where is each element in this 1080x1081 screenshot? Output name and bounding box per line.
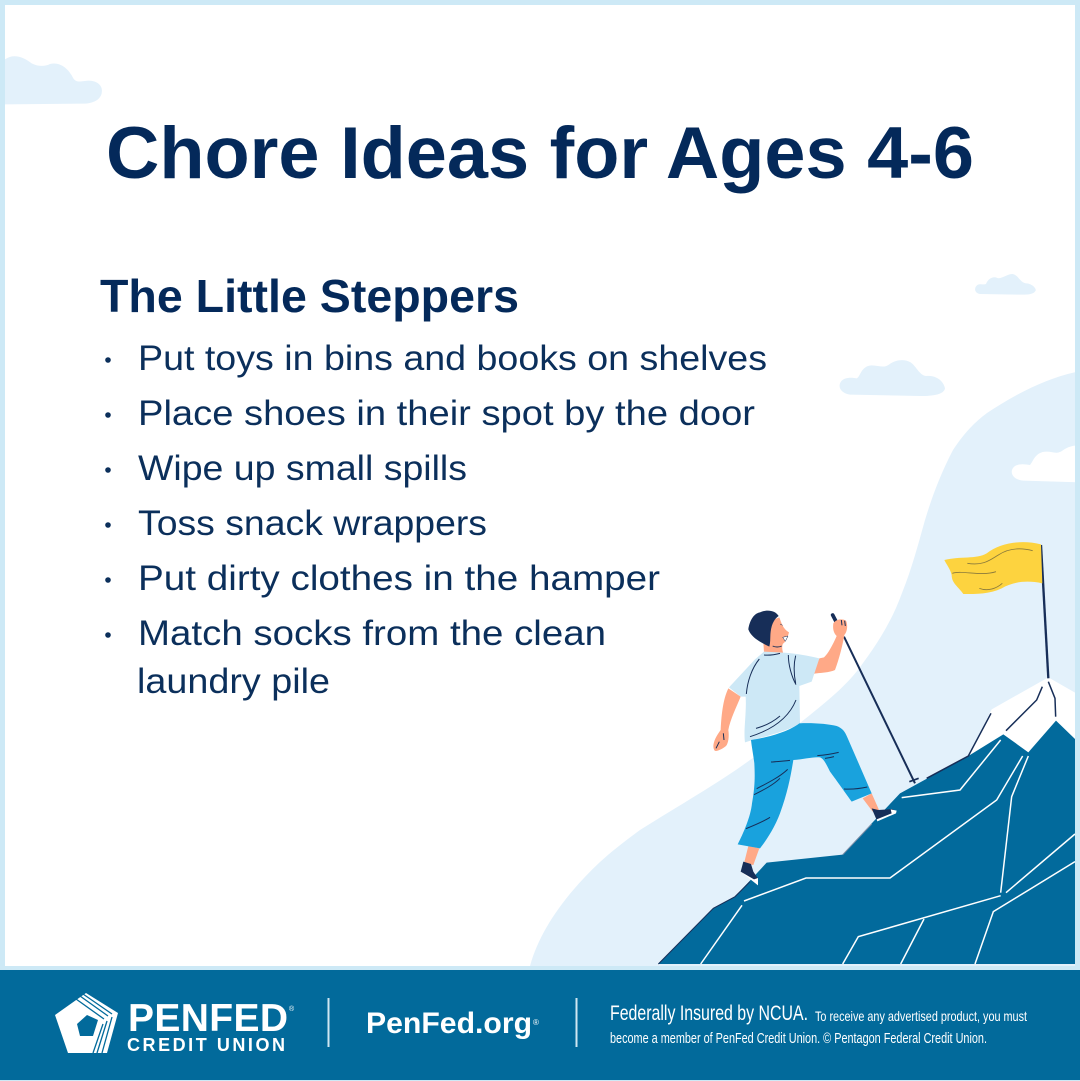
bullet list: Put dirty clothes in the hamper [138, 559, 660, 598]
brand wordmark: ® [289, 1005, 295, 1013]
pants [738, 723, 872, 848]
right arm [813, 619, 847, 674]
bullet list: Place shoes in their spot by the door [138, 394, 755, 433]
hiker figure [713, 611, 897, 885]
mountain dark outlines [658, 682, 1056, 964]
legs [744, 793, 879, 865]
mountain illustration [658, 542, 1075, 964]
icon: trekking pole [833, 615, 919, 783]
left shoe [741, 862, 758, 881]
website: PenFed.org [366, 1007, 532, 1040]
icon: PenFed logo [55, 993, 118, 1053]
icon: snow cap [968, 677, 1075, 756]
hair [748, 611, 779, 647]
disclaimer: Federally Insured by NCUA. [610, 1002, 808, 1025]
cloud: white on hill [1012, 445, 1077, 482]
cloud: small right [975, 274, 1036, 295]
neck and face [763, 617, 789, 653]
left arm [713, 688, 741, 751]
disclaimer [610, 1002, 1027, 1047]
shirt [729, 652, 819, 742]
cloud: middle right [840, 360, 945, 396]
clothing fold lines [716, 620, 867, 829]
footer bar [0, 970, 1080, 1080]
website: ® [533, 1018, 539, 1027]
background hill [530, 372, 1076, 966]
bullet list: Match socks from the clean [138, 614, 606, 653]
bullet list: Toss snack wrappers [138, 504, 487, 543]
bullet list: Wipe up small spills [138, 449, 467, 488]
icon: flag [944, 542, 1048, 678]
bullet list [105, 339, 767, 701]
right shoe [872, 808, 893, 820]
title: Chore Ideas for Ages 4-6 [106, 113, 974, 194]
mountain ridge lines [701, 740, 1075, 964]
icon: mountain body [658, 721, 1075, 964]
mouth and eye [780, 624, 788, 641]
brand wordmark: PENFED [128, 997, 288, 1040]
bullet list: laundry pile [137, 662, 330, 701]
bullet list: Put toys in bins and books on shelves [138, 339, 767, 378]
cloud: top left [5, 56, 102, 104]
brand wordmark: CREDIT UNION [127, 1035, 285, 1055]
subheading: The Little Steppers [100, 270, 519, 322]
